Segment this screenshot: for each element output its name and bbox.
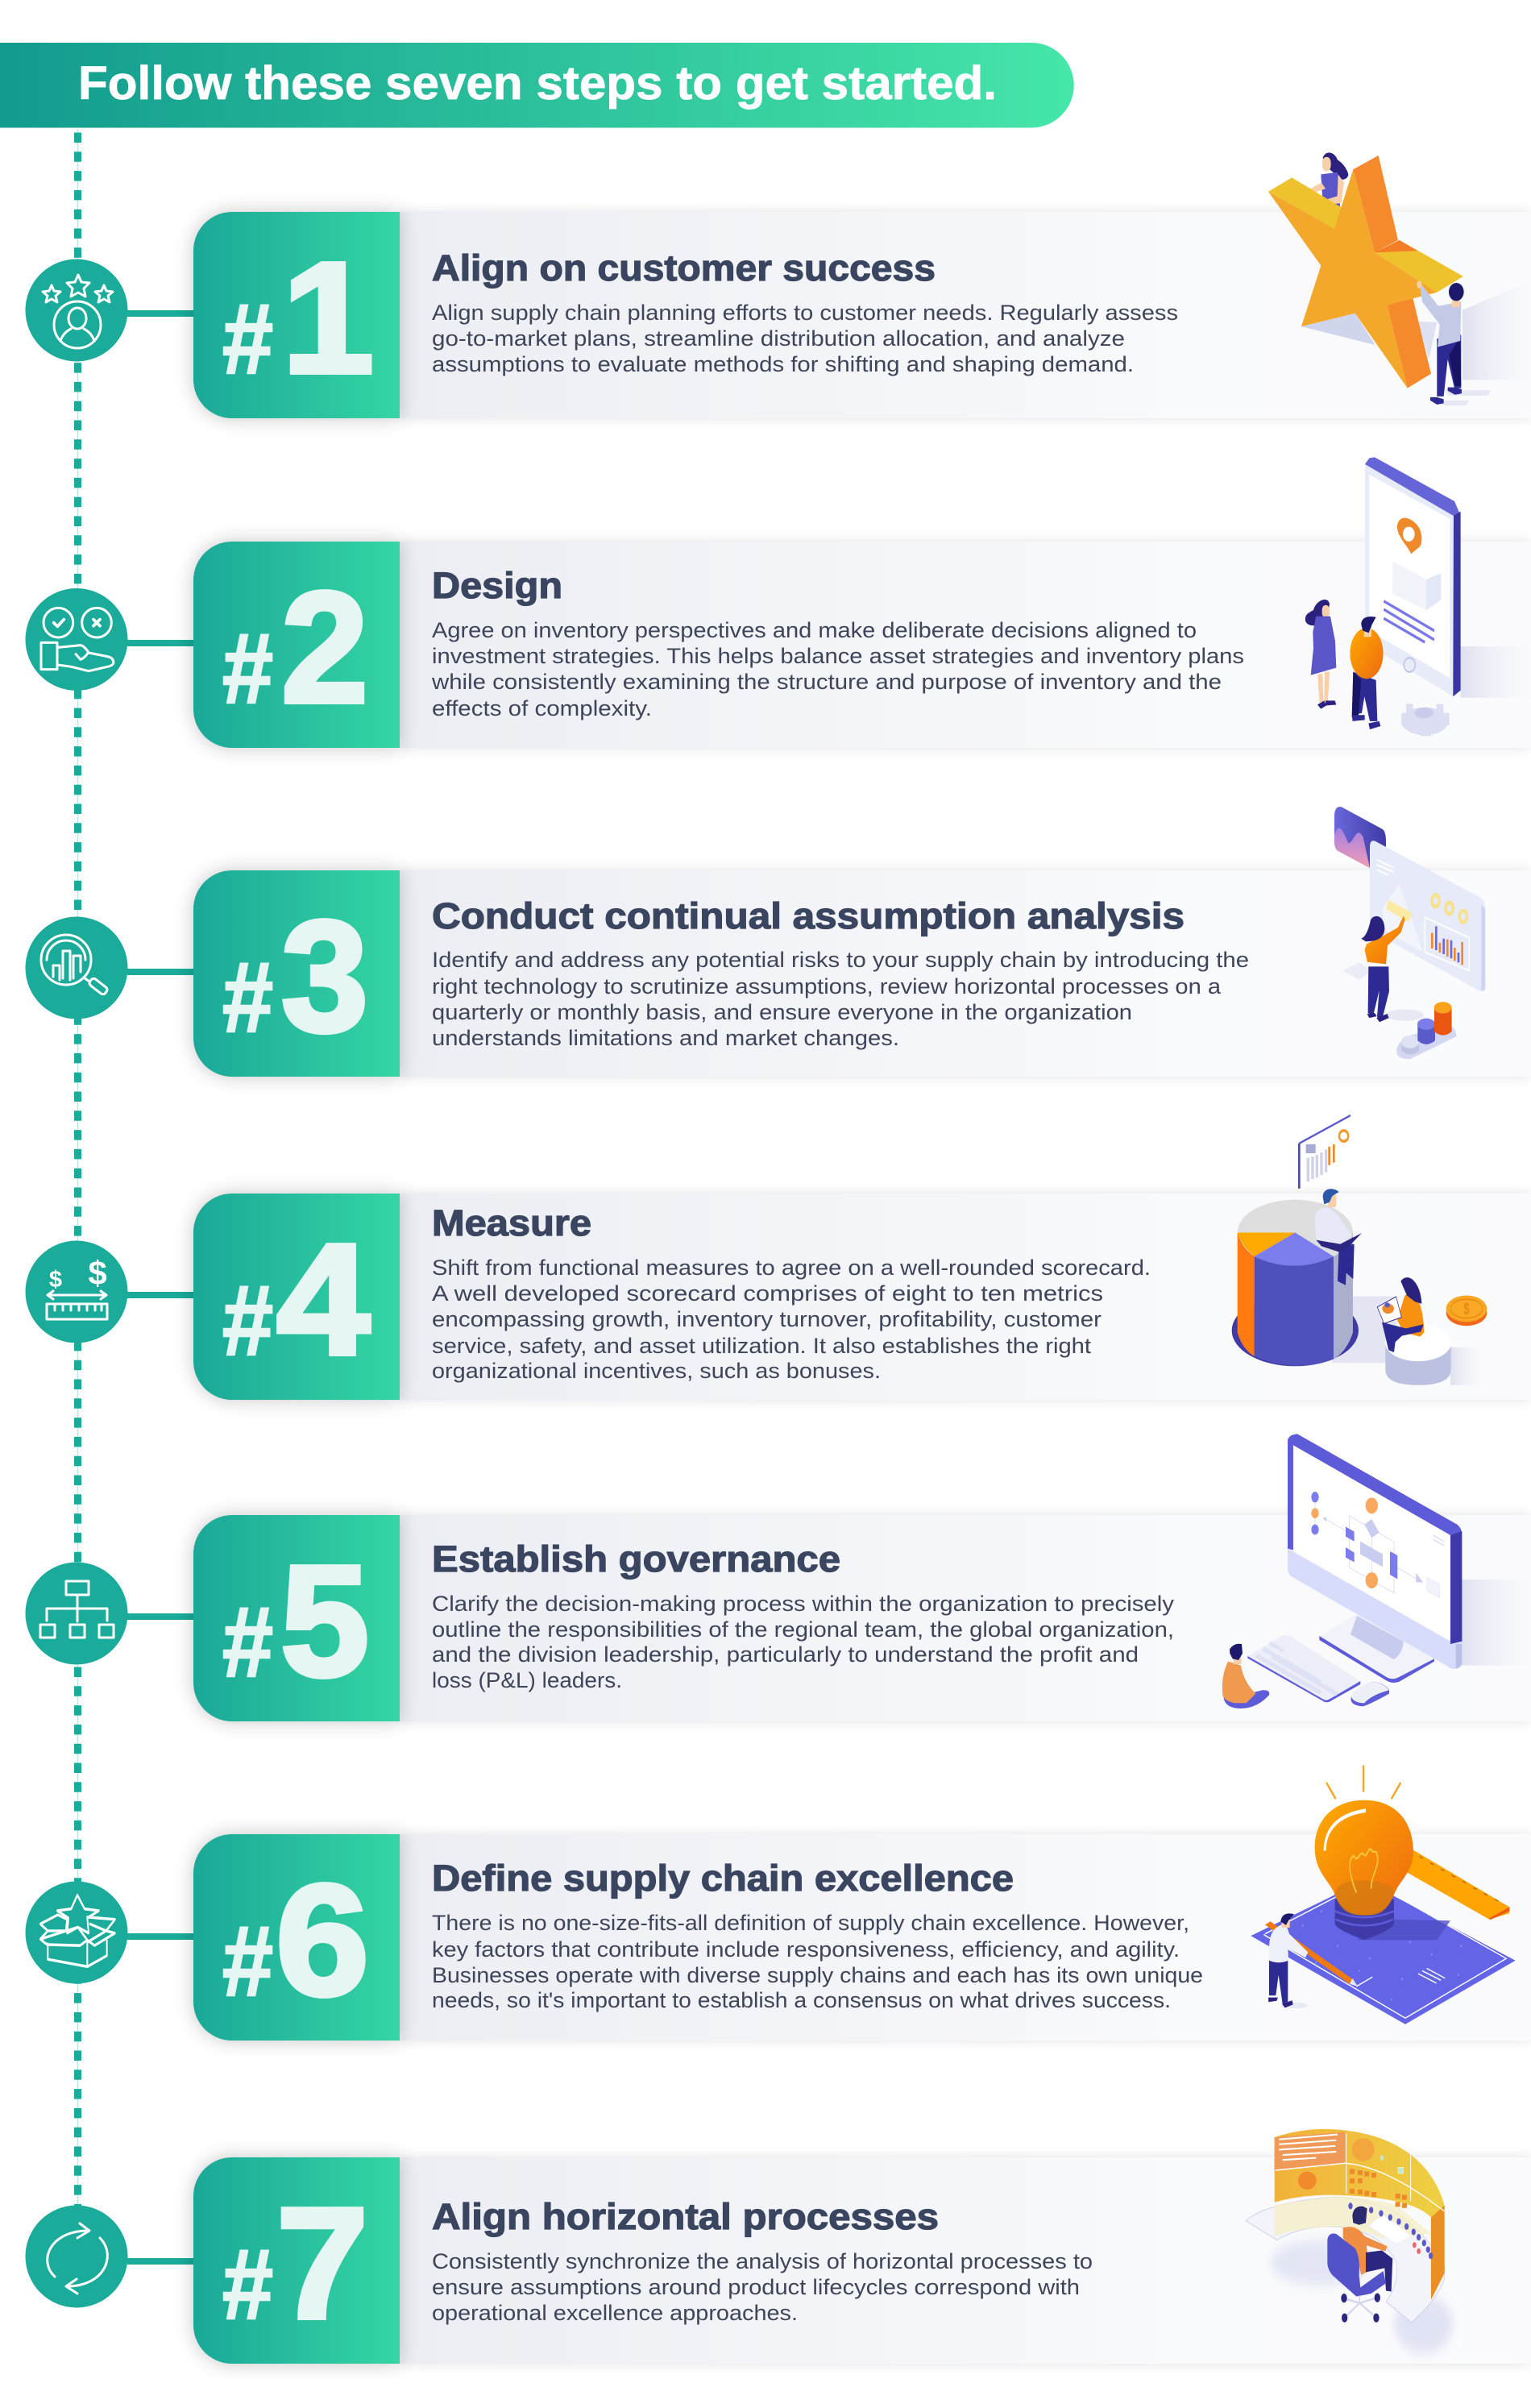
step 5 connector bbox=[127, 1613, 195, 1620]
step 7 body text: ensure assumptions around product lifecycles correspond with bbox=[432, 2275, 1080, 2299]
woman on stool bbox=[1377, 1277, 1451, 1385]
step 5 number badge: # bbox=[222, 1588, 273, 1698]
cylinders on tray bbox=[1396, 1002, 1456, 1059]
step 2 body text bbox=[431, 618, 1244, 720]
icon: money and ruler: $ bbox=[88, 1254, 107, 1292]
step 2 body text: while consistently examining the structure and purpose of inventory and the bbox=[431, 670, 1222, 694]
illustration: curved control desk with operator bbox=[1246, 2129, 1453, 2353]
woman behind star bbox=[1305, 152, 1348, 210]
step 7 bbox=[26, 2129, 1531, 2364]
keyboard and buttons bbox=[1348, 2202, 1433, 2259]
man with pencil bbox=[1265, 1913, 1358, 2008]
mouse bbox=[1351, 1683, 1389, 1706]
keyboard bbox=[1247, 1635, 1360, 1702]
step 6 number badge: # bbox=[222, 1907, 273, 2017]
icon: org chart bbox=[26, 1562, 127, 1665]
step 4 body text: Shift from functional measures to agree on a well-rounded scorecard. bbox=[432, 1256, 1151, 1280]
step 1 body text: assumptions to evaluate methods for shifting and shaping demand. bbox=[432, 352, 1134, 376]
gear bbox=[1401, 704, 1450, 736]
illustration: analyst at dashboard bbox=[1334, 807, 1485, 1059]
step 5 body text: outline the responsibilities of the regional team, the global organization, bbox=[432, 1617, 1174, 1642]
icon: star in open box bbox=[26, 1881, 127, 1984]
step 2 body text: Agree on inventory perspectives and make deliberate decisions aligned to bbox=[432, 618, 1197, 642]
panel: step 2 background bbox=[400, 542, 1531, 748]
step 6 body text: key factors that contribute include responsiveness, efficiency, and agility. bbox=[432, 1937, 1180, 1962]
illustration: pie chart cylinder with people bbox=[1232, 1115, 1487, 1385]
timeline dashed connector bbox=[77, 129, 79, 2212]
step 4 heading: Measure bbox=[432, 1202, 591, 1243]
panel: step 7 background bbox=[400, 2157, 1531, 2364]
scorecard panel bbox=[1299, 1115, 1351, 1190]
step 3 body text: understands limitations and market changes. bbox=[432, 1026, 899, 1050]
title banner bbox=[0, 43, 1074, 127]
step 3 body text: Identify and address any potential risks to your supply chain by introducing the bbox=[432, 948, 1249, 972]
step 3 connector bbox=[127, 969, 195, 975]
illustration: light bulb on blueprint bbox=[1251, 1765, 1516, 2024]
step 3 number badge bbox=[193, 870, 400, 1077]
seated person bbox=[1222, 1644, 1269, 1708]
step 5 body text bbox=[432, 1592, 1175, 1692]
panel: step 1 background bbox=[400, 212, 1531, 418]
step 4 number badge: 4 bbox=[276, 1211, 370, 1388]
panel: step 5 background bbox=[400, 1515, 1531, 1721]
curved display bbox=[1275, 2129, 1445, 2300]
step 4 body text: encompassing growth, inventory turnover, profitability, customer bbox=[432, 1307, 1102, 1331]
map pin bbox=[1397, 518, 1421, 554]
step 1 body text bbox=[432, 301, 1178, 376]
step 7 body text bbox=[432, 2249, 1093, 2325]
step 2 number badge: 2 bbox=[281, 559, 368, 736]
step 3 body text bbox=[432, 948, 1249, 1050]
step 5 body text: loss (P&L) leaders. bbox=[432, 1668, 622, 1692]
step 4 body text: organizational incentives, such as bonuses. bbox=[432, 1359, 881, 1383]
step 7 number badge: 7 bbox=[276, 2175, 368, 2352]
icon: magnifier over bar chart bbox=[26, 917, 127, 1019]
step 4 body text bbox=[432, 1256, 1151, 1383]
step 5 heading: Establish governance bbox=[432, 1538, 840, 1580]
step 3 number badge: 3 bbox=[281, 888, 368, 1065]
step 1 bbox=[26, 152, 1531, 418]
panel: step 6 background bbox=[400, 1834, 1531, 2041]
step 5 number badge bbox=[193, 1515, 400, 1721]
step 6 body text: There is no one-size-fits-all definition of supply chain excellence. However, bbox=[432, 1911, 1189, 1935]
step 3 bbox=[26, 807, 1531, 1077]
step 6 number badge: 6 bbox=[276, 1852, 369, 2028]
woman and man bbox=[1305, 600, 1384, 729]
step 6 body text bbox=[432, 1911, 1203, 2012]
step 4 connector bbox=[127, 1292, 195, 1298]
step 5 number badge: 5 bbox=[280, 1533, 369, 1709]
icon: cycle arrows bbox=[26, 2205, 127, 2308]
icon: stars and person bbox=[26, 259, 127, 361]
illustration: desktop computer with flowchart bbox=[1222, 1434, 1531, 1708]
icon: money and ruler: $ bbox=[49, 1267, 62, 1293]
man with laptop bbox=[1315, 1189, 1362, 1285]
step 3 body text: right technology to scrutinize assumptions, review horizontal processes on a bbox=[432, 974, 1222, 998]
step 7 connector bbox=[127, 2258, 195, 2265]
step 3 number badge: # bbox=[222, 943, 273, 1053]
step 1 connector bbox=[127, 310, 195, 317]
step 1 body text: go-to-market plans, streamline distribution allocation, and analyze bbox=[432, 326, 1125, 351]
step 1 number badge: 1 bbox=[282, 230, 374, 406]
step 6 bbox=[26, 1765, 1531, 2041]
step 5 body text: and the division leadership, particularly to understand the profit and bbox=[432, 1642, 1139, 1667]
step 2 body text: effects of complexity. bbox=[432, 696, 652, 720]
title banner: Follow these seven steps to get started. bbox=[78, 57, 997, 110]
icon: hand with check and cross bbox=[26, 588, 127, 691]
step 6 number badge bbox=[193, 1834, 400, 2041]
step 4 number badge: # bbox=[222, 1266, 273, 1376]
step 1 number badge bbox=[193, 212, 400, 418]
step 1 body text: Align supply chain planning efforts to customer needs. Regularly assess bbox=[432, 301, 1178, 325]
step 3 heading: Conduct continual assumption analysis bbox=[432, 895, 1185, 936]
step 4 number badge bbox=[193, 1194, 400, 1400]
panel: step 3 background bbox=[400, 870, 1531, 1077]
step 6 body text: needs, so it's important to establish a consensus on what drives success. bbox=[432, 1988, 1171, 2012]
illustration: phone with people bbox=[1305, 457, 1531, 736]
step 2 body text: investment strategies. This helps balance asset strategies and inventory plans bbox=[432, 644, 1244, 668]
step 3 body text: quarterly or monthly basis, and ensure everyone in the organization bbox=[432, 1000, 1132, 1024]
step 7 number badge: # bbox=[222, 2230, 273, 2340]
operator in chair bbox=[1327, 2207, 1392, 2323]
parcel bbox=[1392, 562, 1426, 610]
step 7 heading: Align horizontal processes bbox=[432, 2196, 939, 2237]
coin: $ bbox=[1463, 1299, 1470, 1318]
woman pointing bbox=[1361, 916, 1405, 1022]
panel: step 4 background bbox=[400, 1194, 1531, 1400]
icon: money and ruler bbox=[26, 1241, 127, 1343]
man lifting star bbox=[1417, 280, 1464, 405]
illustration: star with two people bbox=[1268, 152, 1531, 405]
light rays bbox=[1326, 1765, 1400, 1799]
flowchart bbox=[1311, 1492, 1444, 1598]
step 2 number badge bbox=[193, 542, 400, 748]
desk bbox=[1246, 2197, 1445, 2323]
step 1 heading: Align on customer success bbox=[432, 247, 936, 289]
step 4 body text: A well developed scorecard comprises of eight to ten metrics bbox=[432, 1281, 1103, 1306]
step 2 heading: Design bbox=[432, 565, 562, 606]
step 2 number badge: # bbox=[222, 614, 273, 724]
step 7 body text: operational excellence approaches. bbox=[432, 2301, 798, 2325]
step 6 heading: Define supply chain excellence bbox=[432, 1858, 1014, 1899]
step 4 body text: service, safety, and asset utilization. It also establishes the right bbox=[432, 1334, 1092, 1358]
step 5 bbox=[26, 1434, 1531, 1721]
step 5 body text: Clarify the decision-making process within the organization to precisely bbox=[432, 1592, 1175, 1616]
step 6 body text: Businesses operate with diverse supply chains and each has its own unique bbox=[432, 1963, 1203, 1987]
coin bbox=[1446, 1296, 1487, 1326]
step 6 connector bbox=[127, 1933, 195, 1940]
step 2 bbox=[26, 457, 1531, 748]
step 4 bbox=[26, 1115, 1531, 1400]
step 2 connector bbox=[127, 640, 195, 646]
step 1 number badge: # bbox=[222, 284, 273, 395]
bulb bbox=[1335, 1899, 1394, 1940]
step 7 number badge bbox=[193, 2157, 400, 2364]
step 7 body text: Consistently synchronize the analysis of horizontal processes to bbox=[432, 2249, 1093, 2273]
